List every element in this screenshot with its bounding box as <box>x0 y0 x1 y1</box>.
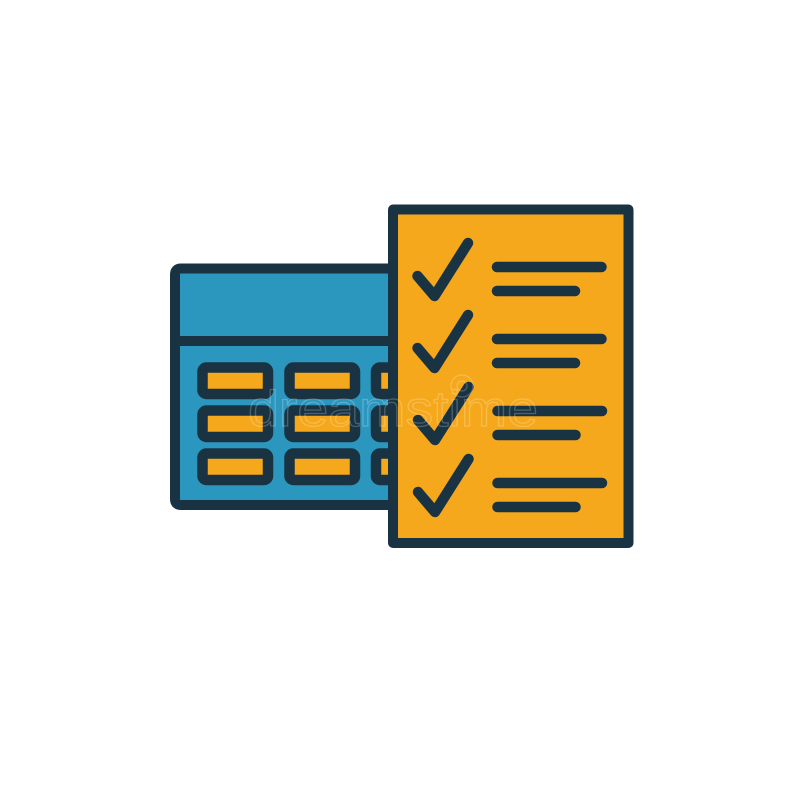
table cells grid <box>202 368 416 480</box>
panel: checklist document <box>393 210 628 543</box>
checklist row 4 <box>418 459 602 512</box>
watermark: dreamstime <box>248 381 538 437</box>
table header divider <box>175 336 395 346</box>
panel: table card <box>175 268 416 505</box>
checklist row 2 <box>418 315 602 368</box>
table body <box>175 268 395 505</box>
checklist row 1 <box>418 243 602 296</box>
checklist row 3 <box>418 387 602 440</box>
document sheet <box>393 210 628 543</box>
